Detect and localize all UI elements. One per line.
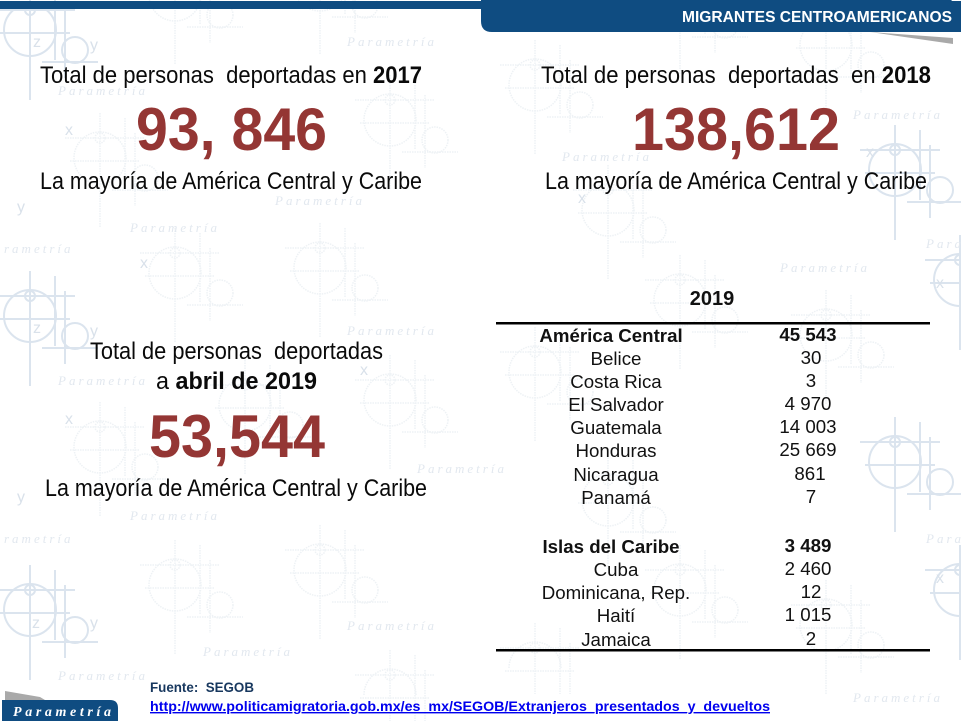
panel: 2019 total: 53,544 [149,403,326,470]
background watermark pattern: Parametría [57,668,148,683]
background watermark pattern: y [90,615,98,632]
source note: Fuente: SEGOB [150,679,254,695]
table values [779,324,837,649]
table values: 2 [806,628,816,649]
panel: 2018 total: La mayoría de América Central y Caribe [545,168,927,195]
table values: 30 [801,347,821,368]
background watermark pattern: Parametría [129,508,220,523]
table values: 7 [806,486,816,507]
logo: Parametría tab [2,691,118,721]
background watermark pattern: y [90,37,98,54]
table values: 3 [806,370,816,391]
table labels: Honduras [575,440,657,461]
source note [150,679,770,714]
panel: 2018 total [541,62,931,195]
background watermark pattern: y [90,323,98,340]
table values: 861 [794,463,826,484]
background watermark pattern: Parametría [852,107,943,122]
table values: 1 015 [785,604,831,625]
logo: Parametría tab: Parametría [13,705,111,720]
background watermark pattern: x [65,411,73,428]
table values: 25 669 [779,439,837,460]
table labels: Haití [597,605,636,626]
background watermark pattern: Parametría [57,83,148,98]
source note: http://www.politicamigratoria.gob.mx/es_mx/SEGOB/Extranjeros_presentados_y_devueltos [150,698,770,714]
panel: 2017 total [40,62,422,195]
table labels: Dominicana, Rep. [542,582,690,603]
table labels [539,325,690,650]
table labels: Jamaica [581,629,651,650]
background watermark pattern: Parametría [57,373,148,388]
panel: 2018 total: Total de personas deportadas en 2018 [541,62,931,89]
table values: 2 460 [785,558,831,579]
background watermark pattern: x [936,275,944,292]
table values: 3 489 [785,535,831,556]
background watermark pattern: x [140,255,148,272]
table labels: Cuba [594,559,639,580]
table: 2019 deportations by country [496,288,930,652]
panel: 2017 total: 93, 846 [136,96,327,163]
table heading: 2019 [690,288,734,310]
table labels: El Salvador [568,394,664,415]
table values: 12 [801,581,821,602]
table labels: Islas del Caribe [542,536,680,557]
header title: MIGRANTES CENTROAMERICANOS [682,9,952,26]
background watermark pattern: Parametría [346,34,437,49]
panel: 2019 total [45,338,427,502]
background watermark pattern: rametría [4,531,74,546]
background watermark pattern: y [17,199,25,216]
background watermark pattern: y [17,489,25,506]
background watermark pattern: z [33,34,41,51]
panel: 2019 total: La mayoría de América Central y Caribe [45,475,427,502]
table labels: Guatemala [570,417,662,438]
panel: 2019 total: a abril de 2019 [156,368,317,395]
table labels: Nicaragua [573,464,659,485]
background watermark pattern: Parametría [202,644,293,659]
background watermark pattern: Parametría [129,220,220,235]
panel: 2017 total: Total de personas deportadas en 2017 [40,62,422,89]
background watermark pattern: rametría [4,241,74,256]
background watermark pattern: x [65,122,73,139]
background watermark pattern: x [866,144,874,161]
background watermark pattern: Parametría [416,461,507,476]
table labels: Belice [591,348,641,369]
background watermark pattern: Parametría [346,323,437,338]
table values: 4 970 [785,393,831,414]
background watermark pattern: Parametría [779,260,870,275]
panel: 2018 total: 138,612 [632,96,840,163]
table labels: Panamá [581,487,651,508]
top header band [0,0,961,44]
background watermark pattern: x [360,362,368,379]
table values: 14 003 [779,416,837,437]
panel: 2019 total: Total de personas deportadas [90,338,383,365]
panel: 2017 total: La mayoría de América Central y Caribe [40,168,422,195]
table values: 45 543 [779,324,837,345]
background watermark pattern: x [936,570,944,587]
background watermark pattern: x [578,190,586,207]
background watermark pattern: z [33,320,41,337]
table labels: América Central [539,325,683,346]
table labels: Costa Rica [570,371,662,392]
background watermark pattern: Parametría [346,618,437,633]
background watermark pattern: z [32,615,40,632]
background watermark pattern: Parametría [852,690,943,705]
background watermark pattern: Parametría [561,149,652,164]
background watermark pattern: Parametría [274,193,365,208]
